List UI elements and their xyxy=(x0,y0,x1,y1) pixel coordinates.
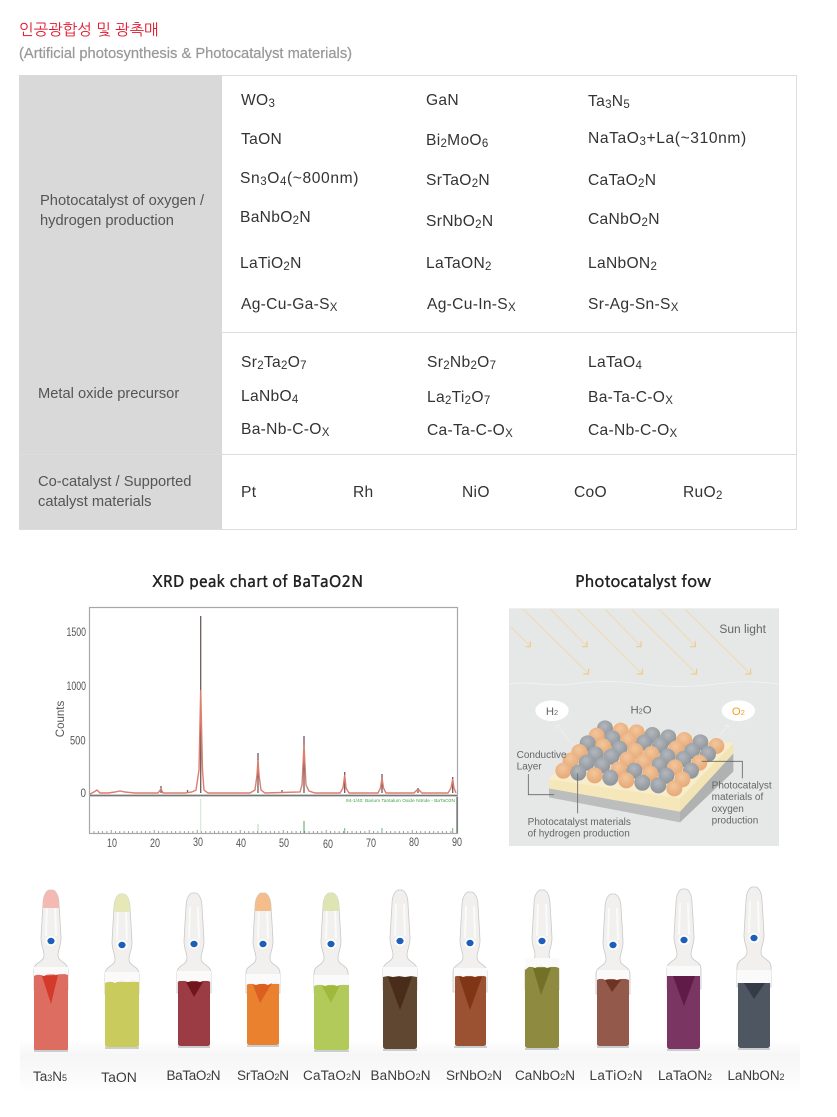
O2 bubble xyxy=(722,700,755,721)
vial: Ta3N5: Ta3N5 xyxy=(33,1069,67,1084)
x axis labels: 70 xyxy=(366,836,376,850)
material list: Ca-Ta-C-OX xyxy=(427,422,513,440)
material list: Rh xyxy=(353,484,374,501)
callout: hydrogen production materials xyxy=(528,773,631,839)
material list: LaNbO4 xyxy=(241,388,299,406)
XRD peak chart: 500 xyxy=(70,734,86,748)
x axis labels: 20 xyxy=(150,836,160,850)
O2 bubble: O2 xyxy=(732,706,745,718)
vial: BaNbO2N: BaNbO2N xyxy=(370,1068,430,1083)
row header: Metal oxide precursor xyxy=(38,386,179,402)
vial: LaTaON2: LaTaON2 xyxy=(658,1068,712,1083)
material list: Ta3N5 xyxy=(588,93,630,111)
material list xyxy=(241,354,678,440)
row: metal oxide precursor xyxy=(19,332,797,455)
icon: sunlight arrows xyxy=(511,609,751,674)
chart title: XRD: XRD peak chart of BaTaO2N xyxy=(152,574,363,590)
row header xyxy=(19,332,222,454)
x axis labels: 80 xyxy=(409,835,419,849)
row header: catalyst materials xyxy=(38,494,151,510)
callout: conductive layer: Conductive xyxy=(517,750,567,761)
callout: conductive layer: Layer xyxy=(517,761,542,772)
material list: RuO2 xyxy=(683,484,723,502)
catalyst plate xyxy=(549,722,733,822)
row header: Photocatalyst of oxygen / xyxy=(40,193,204,209)
XRD peak chart: 1500 xyxy=(66,625,86,639)
material list: Sr-Ag-Sn-SX xyxy=(588,296,679,314)
row header: Co-catalyst / Supported xyxy=(38,474,191,490)
material list: Ag-Cu-In-SX xyxy=(427,296,516,314)
material list: LaTaON2 xyxy=(426,255,492,273)
material list: Sr2Ta2O7 xyxy=(241,354,307,372)
vial: BaTaO2N xyxy=(166,893,220,1083)
x axis labels: 90 xyxy=(452,835,462,849)
material list: Ag-Cu-Ga-SX xyxy=(241,296,338,314)
vial: Ta3N5 xyxy=(33,890,68,1084)
material list xyxy=(241,484,723,502)
material list: Pt xyxy=(241,484,256,501)
material list: TaON xyxy=(241,131,282,148)
material list: NiO xyxy=(462,484,490,501)
vial: TaON: TaON xyxy=(101,1069,137,1085)
fitted curve xyxy=(90,690,456,794)
vial: CaTaO2N xyxy=(303,893,361,1083)
callout: oxygen production materials: oxygen xyxy=(712,804,744,815)
XRD peak chart xyxy=(55,608,462,851)
table: photocatalyst materials xyxy=(19,75,797,530)
callout: oxygen production materials xyxy=(702,761,772,826)
callout: hydrogen production materials: Photocatalyst materials xyxy=(528,817,631,828)
chart title: photocatalyst flow: Photocatalyst fow xyxy=(575,574,712,590)
row header xyxy=(19,455,222,529)
subtitle: English heading: (Artificial photosynthesis & Photocatalyst materials) xyxy=(19,46,352,62)
H2O label: H2O xyxy=(630,704,652,716)
material list: Ba-Ta-C-OX xyxy=(588,389,673,407)
callout: conductive layer xyxy=(517,750,567,795)
material list: La2Ti2O7 xyxy=(427,389,491,407)
XRD peak chart: 1000 xyxy=(66,679,86,693)
row: photocatalyst of oxygen / hydrogen production xyxy=(19,75,797,333)
label: sun light: Sun light xyxy=(719,622,767,636)
measured peaks xyxy=(161,616,453,793)
vial: SrTaO2N: SrTaO2N xyxy=(237,1068,289,1083)
XRD peak chart: 0 xyxy=(80,786,86,800)
material list: Ba-Nb-C-OX xyxy=(241,421,330,439)
material list: WO3 xyxy=(241,92,275,110)
material list: BaNbO2N xyxy=(240,209,311,227)
callout: oxygen production materials: materials of xyxy=(712,792,763,803)
x axis labels: 10 xyxy=(107,836,117,850)
y axis label: Counts xyxy=(55,701,67,737)
material list: SrTaO2N xyxy=(426,172,490,190)
spheres xyxy=(555,720,724,796)
row: co-catalyst / supported catalyst materials xyxy=(19,455,797,530)
title: Korean heading: 인공광합성 및 광촉매 xyxy=(19,22,159,39)
callout: oxygen production materials: production xyxy=(712,815,758,826)
material list: LaNbON2 xyxy=(588,255,657,273)
callout: oxygen production materials: Photocatalyst xyxy=(712,781,772,792)
photocatalyst flow diagram xyxy=(509,608,779,846)
vial: LaTiO2N: LaTiO2N xyxy=(590,1068,642,1083)
material list: GaN xyxy=(426,92,459,109)
material list: LaTiO2N xyxy=(240,255,302,273)
material list: LaTaO4 xyxy=(588,354,642,372)
vial: LaNbON2: LaNbON2 xyxy=(728,1068,784,1083)
vial: BaNbO2N xyxy=(370,890,430,1083)
H2 bubble xyxy=(535,700,569,721)
material list: CoO xyxy=(574,484,607,501)
vial: TaON xyxy=(101,894,139,1085)
vial: LaNbON2 xyxy=(728,887,784,1083)
reference pattern xyxy=(201,799,453,833)
x axis labels: 40 xyxy=(236,836,246,850)
vial: SrTaO2N xyxy=(237,893,289,1083)
row header xyxy=(19,75,222,333)
x axis labels: 60 xyxy=(323,837,333,851)
material list: NaTaO3+La(~310nm) xyxy=(588,130,747,148)
material list: CaNbO2N xyxy=(588,211,660,229)
H2 bubble: H2 xyxy=(546,706,558,718)
XRD peak chart: 84-1/40: Barium Tantalum Oxide Nitride - BaTaO2N xyxy=(346,798,456,804)
vial: SrNbO2N: SrNbO2N xyxy=(446,1068,502,1083)
material list: Sn3O4(~800nm) xyxy=(240,170,359,188)
vial: CaTaO2N: CaTaO2N xyxy=(303,1068,361,1083)
vial floor shadow xyxy=(20,1040,800,1092)
vial: SrNbO2N xyxy=(446,892,502,1083)
callout: hydrogen production materials: of hydrogen production xyxy=(528,828,630,839)
vial: CaNbO2N xyxy=(515,890,575,1083)
material list: Bi2MoO6 xyxy=(426,132,489,150)
x axis labels: 50 xyxy=(279,836,289,850)
row header: hydrogen production xyxy=(40,213,174,229)
material list: CaTaO2N xyxy=(588,172,656,190)
material list: SrNbO2N xyxy=(426,213,493,231)
vial: BaTaO2N: BaTaO2N xyxy=(166,1068,220,1083)
x axis labels: 30 xyxy=(193,835,203,849)
vial: LaTiO2N xyxy=(590,894,642,1083)
x axis labels xyxy=(107,835,462,851)
material list xyxy=(240,92,747,314)
vial: LaTaON2 xyxy=(658,889,712,1083)
vial: CaNbO2N: CaNbO2N xyxy=(515,1068,575,1083)
material list: Sr2Nb2O7 xyxy=(427,354,496,372)
material list: Ca-Nb-C-OX xyxy=(588,422,678,440)
